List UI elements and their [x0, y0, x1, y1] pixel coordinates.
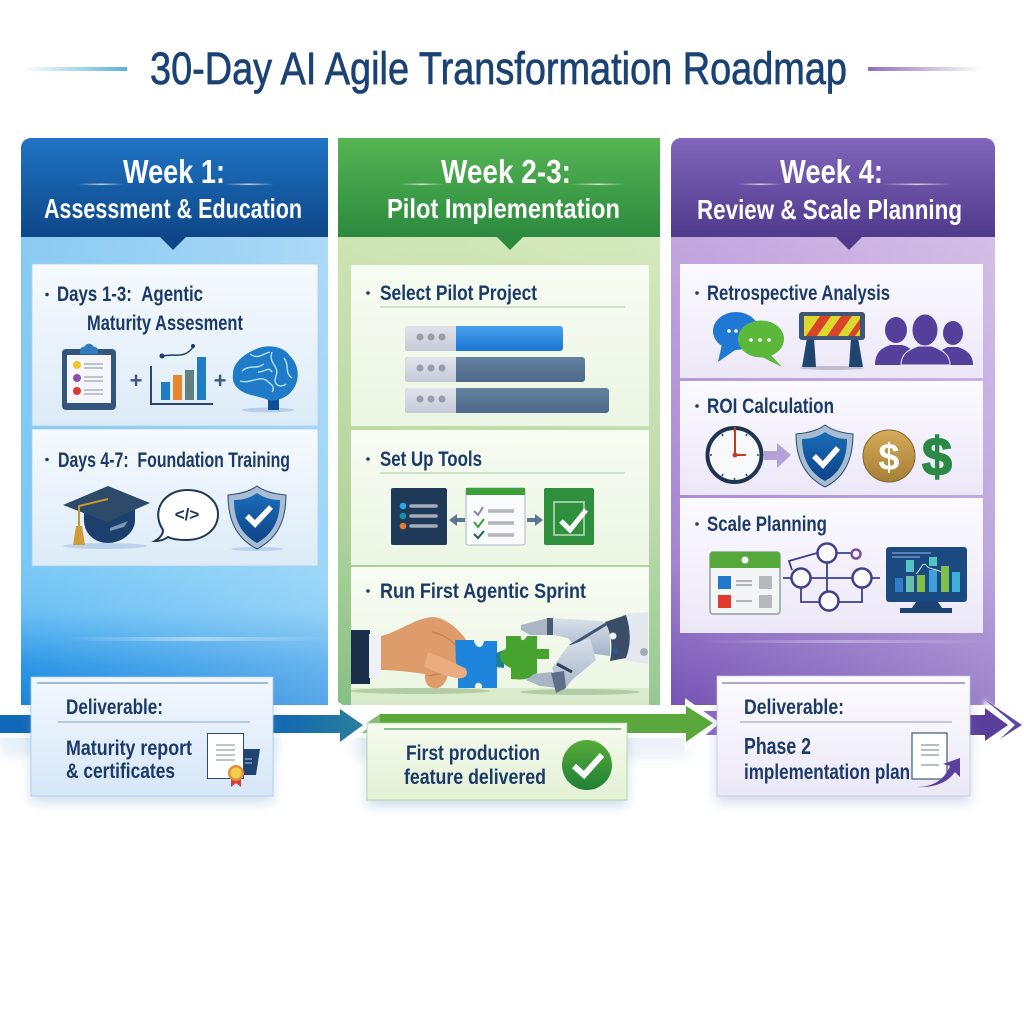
- icon: arrow to shield: [764, 443, 791, 468]
- header: weeks 2-3: Pilot Implementation: [387, 193, 620, 224]
- icon: planning calendar: [710, 552, 780, 614]
- icon: gold coin: [863, 430, 915, 482]
- icon: graduation cap: [63, 486, 150, 549]
- panel: weeks 2-3: [338, 138, 660, 705]
- header: week 4: Review & Scale Planning: [697, 194, 962, 225]
- header: week 1: Assessment & Education: [44, 193, 302, 224]
- icon: network diagram: [783, 544, 880, 610]
- deliverable card: week 4: Phase 2: [744, 733, 811, 759]
- icon: clock: [708, 427, 762, 482]
- icon: arrow right: [527, 514, 543, 526]
- icon: plan document with growth arrow: [912, 733, 960, 787]
- header: week 4: Week 4:: [780, 153, 883, 190]
- illustration: human and robot joining puzzle pieces: [350, 612, 648, 695]
- deliverable card: week 4: Deliverable:: [744, 696, 844, 719]
- card: days 1-3: Days 1-3: Agentic: [57, 283, 203, 306]
- header: weeks 2-3: [338, 138, 660, 250]
- icon: green check square: [544, 488, 594, 545]
- icon: brain: [233, 346, 298, 412]
- icon: report and certificate: [208, 734, 260, 787]
- icon: shield check: [796, 425, 853, 487]
- deliverable card: week 1: Maturity report: [66, 737, 192, 760]
- icon: checklist window: [466, 488, 525, 545]
- icon: shield check: [228, 486, 286, 551]
- timeline arrow: week 4: [700, 699, 1022, 750]
- timeline arrow: weeks 2-3: [352, 698, 720, 758]
- card: retrospective analysis: Retrospective Analysis: [707, 282, 890, 305]
- icon: code speech bubble: [155, 490, 218, 541]
- card: retrospective analysis: [680, 264, 983, 378]
- card: set up tools: Set Up Tools: [380, 448, 482, 471]
- icon: bar chart: [151, 344, 213, 404]
- card: days 4-7: Days 4-7: Foundation Training: [58, 449, 290, 472]
- card: select pilot project: [351, 265, 649, 426]
- icon: tool dashboard: [391, 488, 447, 545]
- panel: week 4: [671, 138, 995, 705]
- icon: chat bubbles: [713, 312, 784, 367]
- card: days 1-3: Maturity Assesment: [87, 312, 243, 335]
- icon: project bars: [405, 326, 609, 413]
- card: run first agentic sprint: Run First Agentic Sprint: [380, 580, 586, 603]
- card: run first agentic sprint: [350, 567, 649, 705]
- icon: code speech bubble: </>: [175, 505, 199, 524]
- icon: team silhouettes: [875, 314, 973, 365]
- deliverable card: week 4: [717, 676, 970, 802]
- card: roi calculation: ROI Calculation: [707, 395, 834, 418]
- icon: plus: +: [214, 368, 226, 393]
- deliverable card: week 4: implementation plan: [744, 761, 910, 784]
- deliverable card: weeks 2-3: First production: [406, 742, 540, 765]
- card: select pilot project: Select Pilot Project: [380, 282, 537, 305]
- icon: plus: +: [130, 368, 142, 393]
- icon: road barrier: [799, 312, 865, 370]
- deliverable card: weeks 2-3: feature delivered: [404, 766, 546, 789]
- icon: analytics monitor: [886, 547, 967, 613]
- deliverable card: week 1: Deliverable:: [66, 696, 163, 719]
- icon: green dollar sign: $: [922, 427, 952, 487]
- card: scale planning: Scale Planning: [707, 513, 827, 536]
- header: week 1: Week 1:: [123, 153, 225, 190]
- deliverable card: week 1: [31, 677, 273, 802]
- header: week 1: [21, 138, 328, 250]
- human sleeve and hand: [351, 617, 472, 688]
- puzzle pieces: [455, 636, 549, 688]
- robot hand: [521, 612, 648, 693]
- icon: arrow left: [449, 514, 465, 526]
- panel: week 1: [21, 138, 328, 705]
- card: roi calculation: [680, 381, 983, 495]
- header: weeks 2-3: Week 2-3:: [441, 153, 571, 190]
- card: days 1-3: [32, 264, 318, 426]
- deliverable card: weeks 2-3: [367, 723, 627, 806]
- card: days 4-7: [32, 429, 318, 566]
- icon: clipboard: [62, 344, 116, 410]
- header: week 4: [671, 138, 995, 250]
- card: scale planning: [680, 498, 983, 633]
- title: 30-Day AI Agile Transformation Roadmap: [150, 43, 847, 94]
- icon: gold coin: $: [878, 437, 900, 479]
- icon: green check badge: [562, 740, 612, 790]
- timeline arrow: week 1: [0, 701, 372, 756]
- card: set up tools: [351, 430, 649, 565]
- human thumb: [424, 652, 467, 678]
- deliverable card: week 1: & certificates: [66, 760, 175, 783]
